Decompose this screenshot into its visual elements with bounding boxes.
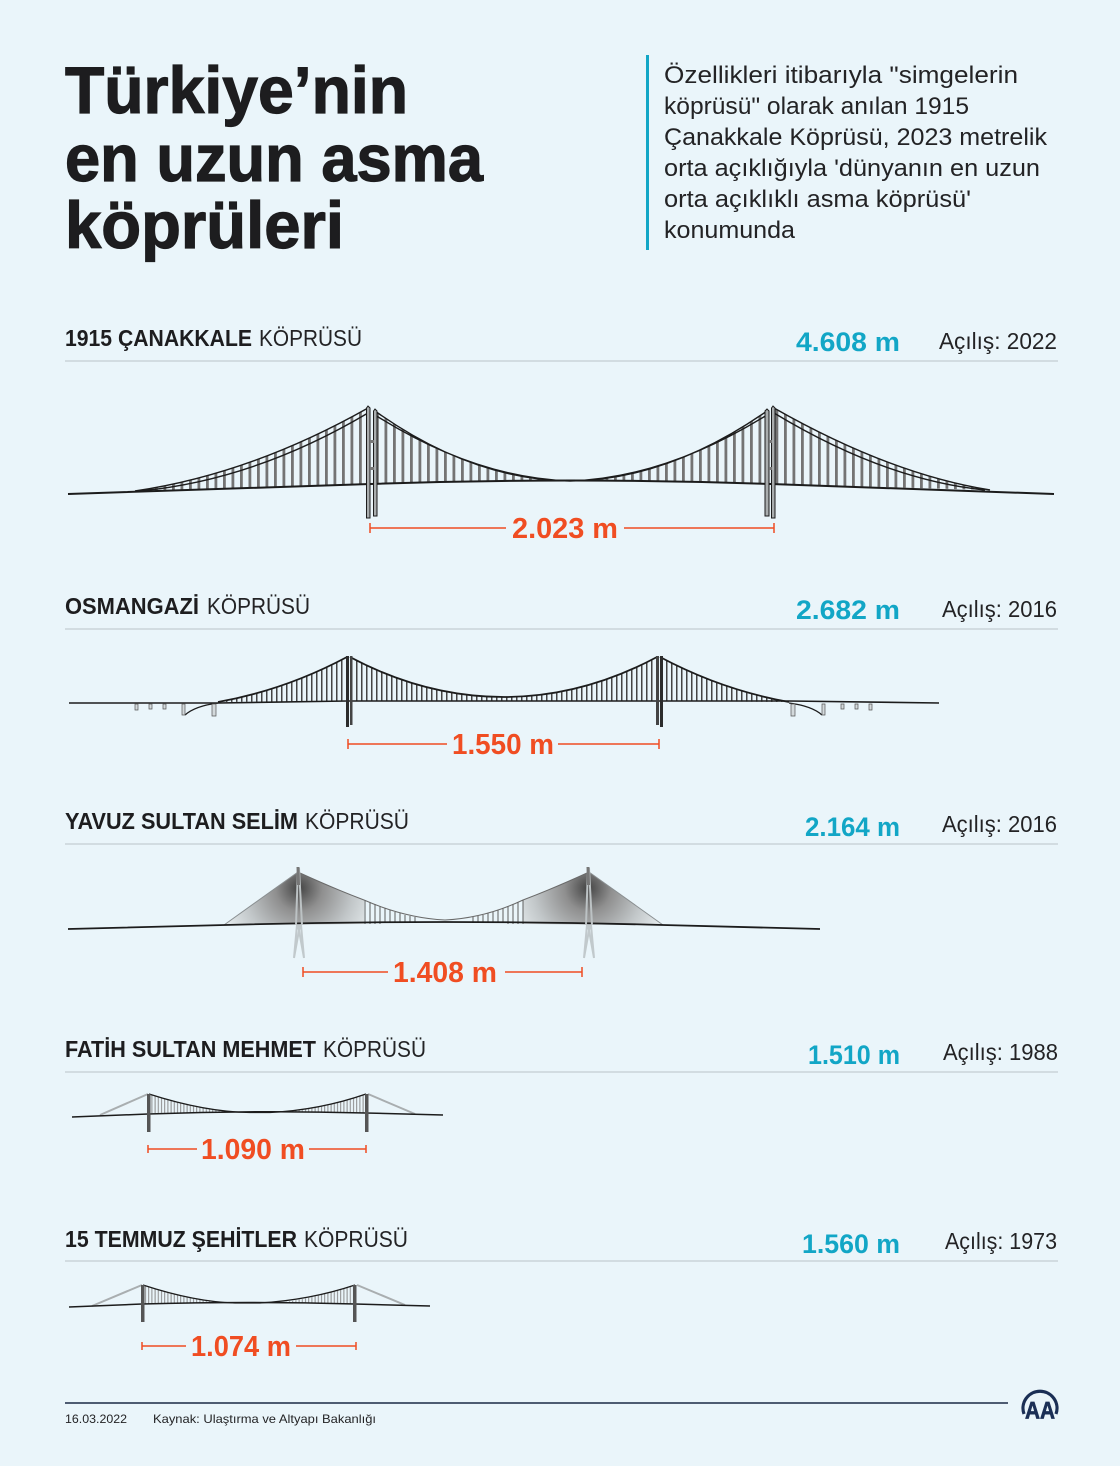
- dimension: 1.074 m: [142, 1331, 356, 1363]
- dimension: 2.023 m: 2.023 m: [512, 513, 618, 545]
- title: Türkiye’nin: [65, 53, 408, 127]
- title: köprüleri: [65, 188, 344, 262]
- dimension: 1.090 m: [148, 1134, 366, 1166]
- dimension: 2.023 m: [370, 513, 774, 545]
- dimension: 1.550 m: [348, 729, 659, 761]
- panel: Yavuz Sultan Selim header: 2.164 m: [805, 812, 900, 842]
- panel: Fatih Sultan Mehmet header: [65, 1036, 1058, 1072]
- intro text block: orta açıklıklı asma köprüsü': [664, 186, 971, 213]
- intro text block: Çanakkale Köprüsü, 2023 metrelik: [664, 124, 1048, 151]
- intro text block: Özellikleri itibarıyla "simgelerin: [664, 62, 1018, 89]
- footer: date and source: 16.03.2022: [65, 1412, 127, 1426]
- panel: 1915 Çanakkale header: Açılış: 2022: [939, 328, 1057, 354]
- panel: Yavuz Sultan Selim header: [65, 808, 1058, 844]
- panel: 15 Temmuz Şehitler header: [65, 1226, 1058, 1261]
- panel: Osmangazi header: [65, 593, 1058, 629]
- icon: AA logo: AA: [1025, 1398, 1055, 1424]
- panel: 1915 Çanakkale header: 1915 ÇANAKKALE: [65, 325, 252, 351]
- panel: Fatih Sultan Mehmet header: KÖPRÜSÜ: [323, 1036, 426, 1062]
- footer: date and source: [65, 1403, 1008, 1426]
- panel: Yavuz Sultan Selim header: YAVUZ SULTAN SELİM: [65, 808, 298, 834]
- panel: Osmangazi header: Açılış: 2016: [942, 596, 1057, 622]
- panel: Fatih Sultan Mehmet header: FATİH SULTAN MEHMET: [65, 1036, 316, 1062]
- bridge drawing: Fatih Sultan Mehmet: [72, 1094, 443, 1132]
- dimension: 1.408 m: [303, 957, 582, 989]
- title: [65, 53, 484, 262]
- bridge drawing: Osmangazi: [69, 656, 939, 727]
- bridge drawing: Yavuz Sultan Selim: [68, 867, 820, 958]
- panel: 1915 Çanakkale header: KÖPRÜSÜ: [259, 325, 362, 351]
- panel: Yavuz Sultan Selim header: Açılış: 2016: [942, 811, 1057, 837]
- footer: date and source: Kaynak: Ulaştırma ve Altyapı Bakanlığı: [153, 1412, 376, 1426]
- panel: 15 Temmuz Şehitler header: 15 TEMMUZ ŞEHİTLER: [65, 1226, 297, 1252]
- bridge drawing: 15 Temmuz Şehitler: [69, 1285, 430, 1322]
- panel: 15 Temmuz Şehitler header: Açılış: 1973: [945, 1228, 1057, 1254]
- intro text block: [646, 55, 1048, 250]
- dimension: 1.090 m: 1.090 m: [201, 1134, 305, 1166]
- intro text block: köprüsü" olarak anılan 1915: [664, 93, 969, 120]
- dimension: 1.408 m: 1.408 m: [393, 957, 497, 989]
- panel: Fatih Sultan Mehmet header: Açılış: 1988: [943, 1039, 1058, 1065]
- title: en uzun asma: [65, 121, 484, 195]
- panel: 1915 Çanakkale header: 4.608 m: [796, 327, 900, 357]
- panel: 1915 Çanakkale header: [65, 325, 1058, 361]
- panel: Osmangazi header: 2.682 m: [796, 595, 900, 625]
- intro text block: konumunda: [664, 217, 796, 244]
- panel: Osmangazi header: KÖPRÜSÜ: [207, 593, 310, 619]
- bridge drawing: 1915 Çanakkale: [68, 406, 1054, 518]
- panel: Yavuz Sultan Selim header: KÖPRÜSÜ: [305, 808, 409, 834]
- dimension: 1.074 m: 1.074 m: [191, 1331, 291, 1363]
- panel: 15 Temmuz Şehitler header: KÖPRÜSÜ: [304, 1226, 408, 1252]
- panel: Osmangazi header: OSMANGAZİ: [65, 593, 199, 619]
- dimension: 1.550 m: 1.550 m: [452, 729, 554, 761]
- panel: 15 Temmuz Şehitler header: 1.560 m: [802, 1229, 900, 1259]
- intro text block: orta açıklığıyla 'dünyanın en uzun: [664, 155, 1040, 182]
- panel: Fatih Sultan Mehmet header: 1.510 m: [808, 1040, 900, 1070]
